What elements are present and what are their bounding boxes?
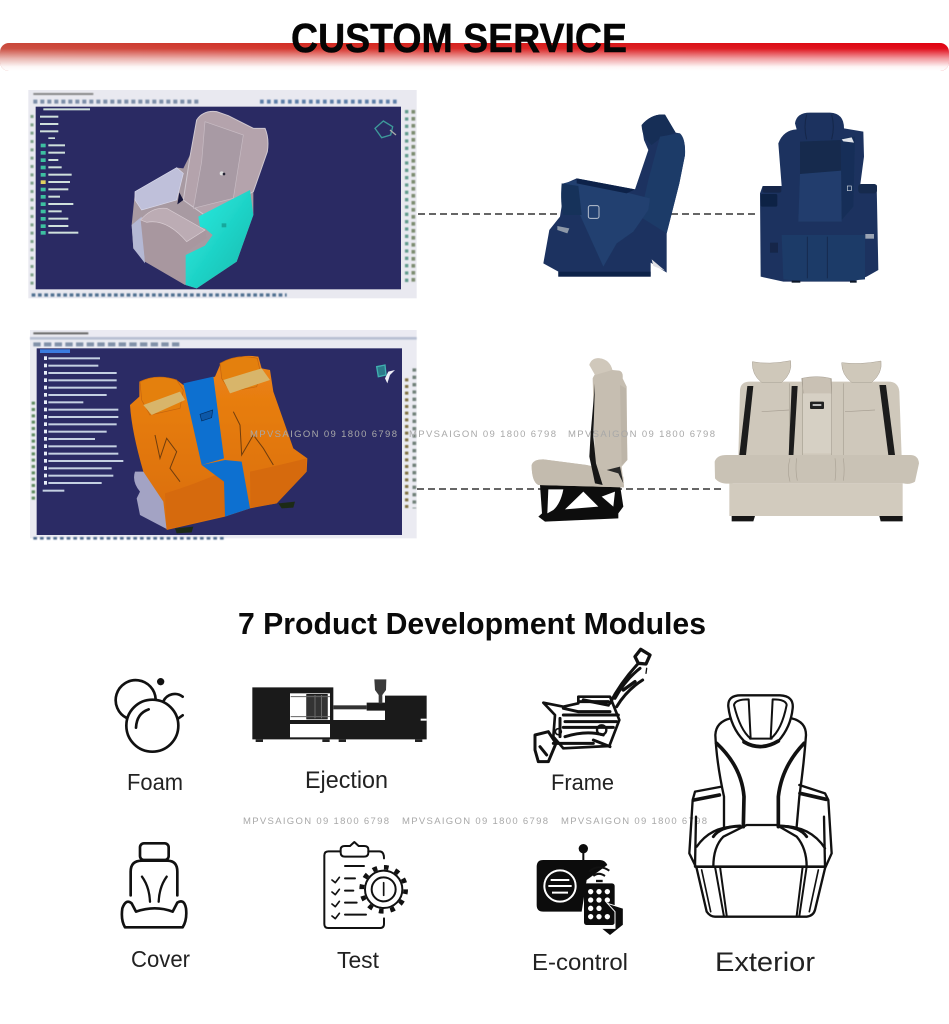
photo: beige bench side view	[532, 358, 627, 522]
icon: exterior seat outline	[689, 695, 832, 917]
label: e-control: E-control	[532, 949, 628, 975]
label: ejection: Ejection	[305, 767, 388, 794]
CAD tree list	[40, 108, 90, 235]
label: frame: Frame	[551, 770, 614, 795]
label: foam: Foam	[127, 769, 183, 795]
icon: seat frame	[535, 649, 650, 762]
title: CUSTOM SERVICE	[291, 15, 627, 61]
CAD seat model	[132, 111, 268, 288]
watermark: row over CAD and bench: MPVSAIGON 09 1800 6798	[409, 429, 556, 440]
CAD tree list	[40, 349, 123, 492]
panel: CAD model of single seat	[28, 90, 417, 298]
watermark: row over modules: MPVSAIGON 09 1800 6798	[561, 816, 707, 827]
CAD viewport	[36, 107, 401, 289]
label: test: Test	[337, 947, 380, 973]
icon: e-control remote	[537, 844, 623, 936]
CAD compass	[375, 121, 396, 138]
icon: foam bubbles	[116, 678, 183, 752]
watermark: row over modules: MPVSAIGON 09 1800 6798	[402, 816, 548, 827]
banner: red gradient bar	[0, 43, 949, 71]
watermark: row over CAD and bench: MPVSAIGON 09 1800 6798	[250, 429, 397, 440]
label: exterior: Exterior	[715, 947, 815, 977]
label: cover: Cover	[131, 946, 190, 972]
CAD compass	[377, 365, 395, 383]
icon: seat cover	[122, 843, 186, 927]
photo: navy seat side view	[543, 115, 685, 277]
CAD viewport	[37, 348, 402, 535]
watermark: row over modules: MPVSAIGON 09 1800 6798	[243, 816, 389, 827]
icon: test clipboard	[324, 842, 406, 928]
dashed connector: first row	[418, 213, 757, 215]
dashed connector: second row	[417, 488, 725, 490]
watermark: row over CAD and bench: MPVSAIGON 09 1800 6798	[568, 429, 715, 440]
watermark: row over modules	[243, 816, 707, 827]
photo: beige bench front view	[715, 361, 919, 521]
heading: modules: 7 Product Development Modules	[238, 606, 706, 641]
CAD bench model	[130, 356, 307, 533]
icon: injection machine	[252, 679, 427, 742]
panel: CAD model of bench seat	[30, 330, 417, 538]
watermark: row over CAD and bench	[250, 429, 715, 440]
photo: navy seat front view	[760, 113, 878, 283]
